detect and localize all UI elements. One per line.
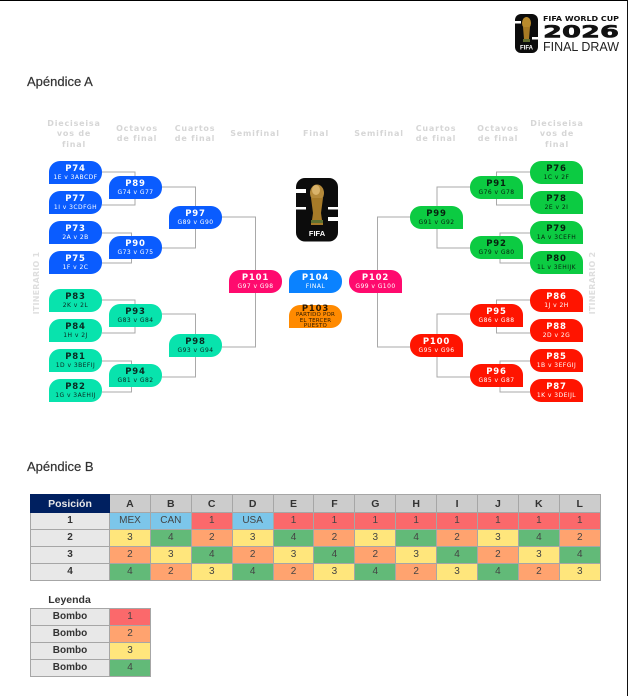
match P86: 1J v 2H bbox=[544, 302, 569, 308]
table: group positions by pot: E bbox=[290, 498, 297, 510]
match P79: 1A v 3CEFH bbox=[537, 234, 576, 240]
match P85 bbox=[530, 349, 583, 372]
match P85: P85 bbox=[546, 352, 567, 362]
match P88: 2D v 2G bbox=[543, 332, 570, 338]
logo text: 2026 bbox=[543, 22, 619, 42]
match P97: G89 v G90 bbox=[178, 218, 213, 226]
match P98: G93 v G94 bbox=[178, 346, 213, 354]
match P94: G81 v G82 bbox=[118, 376, 153, 384]
match P99 bbox=[410, 206, 463, 229]
match P96 bbox=[470, 364, 523, 387]
match P77: 1I v 3CDFGH bbox=[54, 204, 97, 210]
icon: central 26 FIFA trophy logo bbox=[296, 178, 338, 242]
match P92 bbox=[470, 236, 523, 259]
match P92: P92 bbox=[486, 238, 507, 248]
table: group positions by pot: 3 bbox=[577, 566, 583, 577]
column heading: Cuartos de final (left): de final bbox=[175, 134, 215, 143]
column heading: Semifinal (right): Semifinal bbox=[354, 129, 404, 138]
column heading: Cuartos de final (right): Cuartos bbox=[416, 124, 456, 133]
table: group positions by pot: 1 bbox=[291, 515, 296, 526]
match P103 third place: EL TERCER bbox=[300, 318, 331, 324]
table: group positions by pot: 2 bbox=[67, 532, 73, 543]
match P93: G83 v G84 bbox=[118, 316, 153, 324]
match P74: P74 bbox=[65, 164, 86, 174]
table: group positions by pot: 2 bbox=[168, 566, 174, 577]
table: group positions by pot bbox=[30, 494, 601, 581]
match P104 final bbox=[289, 270, 342, 293]
legend table: bombo colours: Bombo bbox=[53, 662, 87, 673]
logo text: FINAL DRAW bbox=[543, 39, 620, 54]
match P77 bbox=[49, 191, 102, 214]
match P84 bbox=[49, 319, 102, 342]
match P101: P101 bbox=[242, 272, 269, 282]
table: group positions by pot: CAN bbox=[160, 515, 181, 526]
column heading: Dieciseisavos de final (right): final bbox=[545, 140, 569, 149]
legend table: bombo colours bbox=[30, 608, 151, 677]
match P84: 1H v 2J bbox=[63, 332, 88, 338]
match P97 bbox=[169, 206, 222, 229]
logo text: FIFA WORLD CUP bbox=[543, 15, 619, 23]
match P90 bbox=[109, 236, 162, 259]
table: group positions by pot: 1 bbox=[577, 515, 583, 526]
legend table: bombo colours: 1 bbox=[127, 611, 133, 622]
column heading: Final: Final bbox=[303, 129, 329, 138]
page frame right line bbox=[627, 0, 628, 696]
table: group positions by pot: C bbox=[208, 498, 216, 510]
column heading: Cuartos de final (left): Cuartos bbox=[175, 124, 215, 133]
column heading: Octavos de final (right) bbox=[477, 124, 519, 143]
table: group positions by pot: Posición bbox=[48, 498, 92, 510]
table: group positions by pot: 3 bbox=[372, 532, 378, 543]
heading: Apéndice B: Apéndice B bbox=[27, 459, 94, 474]
table: group positions by pot: 1 bbox=[495, 515, 501, 526]
table: group positions by pot: 4 bbox=[127, 566, 133, 577]
table: group positions by pot: 3 bbox=[67, 549, 73, 560]
match P75: P75 bbox=[65, 254, 86, 264]
match P74: 1E v 3ABCDF bbox=[53, 174, 98, 180]
match P98: P98 bbox=[185, 336, 206, 346]
table: group positions by pot: K bbox=[535, 498, 543, 510]
table: group positions by pot: 1 bbox=[67, 515, 73, 526]
match P87: P87 bbox=[546, 382, 567, 392]
table: group positions by pot: 4 bbox=[168, 532, 174, 543]
legend table: bombo colours: Bombo bbox=[53, 628, 87, 639]
match P86: P86 bbox=[546, 292, 567, 302]
table: group positions by pot: 1 bbox=[372, 515, 378, 526]
table: group positions by pot: 1 bbox=[454, 515, 460, 526]
column heading: Octavos de final (right): Octavos bbox=[477, 124, 519, 133]
match P103 third place: PUESTO bbox=[304, 323, 327, 329]
table: group positions by pot: 4 bbox=[536, 532, 542, 543]
match P73 bbox=[49, 221, 102, 244]
table: group positions by pot: 4 bbox=[454, 549, 460, 560]
table: group positions by pot: 4 bbox=[250, 566, 255, 577]
match P104 final: FINAL bbox=[306, 282, 325, 290]
match P101 bbox=[229, 270, 282, 293]
table: group positions by pot: 3 bbox=[536, 549, 542, 560]
column heading: Dieciseisavos de final (right) bbox=[530, 119, 584, 149]
table: group positions by pot: 2 bbox=[413, 566, 419, 577]
match P85: 1B v 3EFGIJ bbox=[537, 362, 576, 368]
match P78: 2E v 2I bbox=[545, 204, 568, 210]
match P86 bbox=[530, 289, 583, 312]
match P82: P82 bbox=[65, 382, 86, 392]
match P88 bbox=[530, 319, 583, 342]
match P90: P90 bbox=[125, 238, 146, 248]
match P88: P88 bbox=[546, 322, 567, 332]
table: group positions by pot: 4 bbox=[67, 566, 73, 577]
label: Itinerario 2: ITINERARIO 2 bbox=[588, 252, 597, 314]
legend table: bombo colours: Bombo bbox=[53, 611, 87, 622]
column heading: Dieciseisavos de final (left): Dieciseisa bbox=[47, 119, 101, 128]
label: Itinerario 1: ITINERARIO 1 bbox=[32, 252, 41, 314]
match P102: P102 bbox=[362, 272, 389, 282]
table: group positions by pot: 2 bbox=[291, 566, 296, 577]
match P73: P73 bbox=[65, 224, 86, 234]
match P99: P99 bbox=[426, 208, 447, 218]
table: group positions by pot: 3 bbox=[413, 549, 419, 560]
match P89: P89 bbox=[125, 178, 146, 188]
match P87 bbox=[530, 379, 583, 402]
column heading: Semifinal (left): Semifinal bbox=[230, 129, 280, 138]
match P96: G85 v G87 bbox=[478, 376, 514, 384]
table: group positions by pot: 4 bbox=[372, 566, 378, 577]
match P78 bbox=[530, 191, 583, 214]
table: group positions by pot: 3 bbox=[209, 566, 214, 577]
match P95: G86 v G88 bbox=[478, 316, 514, 324]
match P95 bbox=[470, 304, 523, 327]
match P80: P80 bbox=[546, 254, 567, 264]
match P99: G91 v G92 bbox=[418, 218, 454, 226]
table: group positions by pot: 3 bbox=[250, 532, 255, 543]
match P79: P79 bbox=[546, 224, 567, 234]
match P100: G95 v G96 bbox=[418, 346, 454, 354]
table: group positions by pot: 2 bbox=[209, 532, 214, 543]
table: group positions by pot: 1 bbox=[536, 515, 542, 526]
table: group positions by pot: 2 bbox=[372, 549, 378, 560]
column heading: Dieciseisavos de final (left): final bbox=[62, 140, 86, 149]
match P79 bbox=[530, 221, 583, 244]
table: group positions by pot: 4 bbox=[577, 549, 583, 560]
match P95: P95 bbox=[486, 306, 507, 316]
page frame top line bbox=[0, 0, 628, 1]
match P76: 1C v 2F bbox=[544, 174, 569, 180]
match P90: G73 v G75 bbox=[118, 248, 153, 256]
match P94 bbox=[109, 364, 162, 387]
column heading: Octavos de final (right): de final bbox=[478, 134, 518, 143]
match P82 bbox=[49, 379, 102, 402]
match P84: P84 bbox=[65, 322, 86, 332]
logo text bbox=[543, 15, 620, 54]
match P74 bbox=[49, 161, 102, 184]
match P80 bbox=[530, 251, 583, 274]
match P96: P96 bbox=[486, 366, 507, 376]
legend title: Leyenda bbox=[48, 594, 91, 606]
match P102: G99 v G100 bbox=[355, 282, 396, 290]
icon: small 26 trophy emblem bbox=[515, 14, 538, 53]
match P91: G76 v G78 bbox=[478, 188, 514, 196]
legend table: bombo colours: 2 bbox=[127, 628, 133, 639]
table: group positions by pot: 4 bbox=[413, 532, 419, 543]
table: group positions by pot: 3 bbox=[168, 549, 174, 560]
table: group positions by pot: 3 bbox=[291, 549, 296, 560]
table: group positions by pot: USA bbox=[242, 515, 263, 526]
match P91: P91 bbox=[486, 178, 507, 188]
column heading: Octavos de final (left) bbox=[116, 124, 158, 143]
match P82: 1G v 3AEHIJ bbox=[55, 392, 96, 398]
match P78: P78 bbox=[546, 194, 567, 204]
table: group positions by pot: 2 bbox=[577, 532, 583, 543]
match P83: P83 bbox=[65, 292, 86, 302]
match P100: P100 bbox=[423, 336, 450, 346]
table: group positions by pot: G bbox=[371, 498, 379, 510]
match P103 third place: P103 bbox=[302, 304, 329, 314]
table: group positions by pot: 4 bbox=[495, 566, 501, 577]
table: group positions by pot: 2 bbox=[454, 532, 460, 543]
match P97: P97 bbox=[185, 208, 206, 218]
match P81: 1D v 3BEFIJ bbox=[56, 362, 95, 368]
legend table: bombo colours: 3 bbox=[127, 645, 133, 656]
match P77: P77 bbox=[65, 194, 86, 204]
table: group positions by pot: F bbox=[331, 498, 338, 510]
match P100 bbox=[410, 334, 463, 357]
match P83 bbox=[49, 289, 102, 312]
match P89: G74 v G77 bbox=[118, 188, 153, 196]
table: group positions by pot: 2 bbox=[332, 532, 337, 543]
table: group positions by pot: 3 bbox=[495, 532, 501, 543]
icon: small 26 trophy emblem: FIFA bbox=[520, 46, 534, 52]
match P94: P94 bbox=[125, 366, 146, 376]
logo: FIFA World Cup 2026 Final Draw bbox=[515, 14, 620, 54]
table: group positions by pot: A bbox=[126, 498, 134, 510]
match P98 bbox=[169, 334, 222, 357]
table: group positions by pot: 2 bbox=[250, 549, 255, 560]
match P81: P81 bbox=[65, 352, 86, 362]
legend table: bombo colours: Bombo bbox=[53, 645, 87, 656]
table: group positions by pot: I bbox=[456, 498, 459, 510]
table: group positions by pot: D bbox=[249, 498, 256, 510]
column heading: Cuartos de final (left) bbox=[175, 124, 215, 143]
icon: central 26 FIFA trophy logo: FIFA bbox=[309, 229, 326, 238]
column heading: Dieciseisavos de final (left) bbox=[47, 119, 101, 149]
match P76 bbox=[530, 161, 583, 184]
match P103 third place bbox=[289, 305, 342, 328]
match P102 bbox=[349, 270, 402, 293]
table: group positions by pot: 4 bbox=[209, 549, 214, 560]
match P92: G79 v G80 bbox=[478, 248, 514, 256]
match P104 final: P104 bbox=[302, 272, 329, 282]
match P75 bbox=[49, 251, 102, 274]
match P93 bbox=[109, 304, 162, 327]
table: group positions by pot: B bbox=[167, 498, 175, 510]
table: group positions by pot: 1 bbox=[413, 515, 419, 526]
match P93: P93 bbox=[125, 306, 146, 316]
match P75: 1F v 2C bbox=[63, 264, 88, 270]
table: group positions by pot: MEX bbox=[119, 515, 141, 526]
match P83: 2K v 2L bbox=[63, 302, 88, 308]
legend table: bombo colours: 4 bbox=[127, 662, 133, 673]
match P76: P76 bbox=[546, 164, 567, 174]
table: group positions by pot: 4 bbox=[291, 532, 296, 543]
table: group positions by pot: J bbox=[495, 498, 501, 510]
table: group positions by pot: 1 bbox=[209, 515, 214, 526]
match P89 bbox=[109, 176, 162, 199]
match P73: 2A v 2B bbox=[62, 234, 89, 240]
column heading: Dieciseisavos de final (right): Dieciseisa bbox=[530, 119, 584, 128]
table: group positions by pot: 3 bbox=[332, 566, 337, 577]
table: group positions by pot: 1 bbox=[332, 515, 337, 526]
column heading: Dieciseisavos de final (right): vos de bbox=[540, 129, 574, 138]
match P81 bbox=[49, 349, 102, 372]
match P87: 1K v 3DEIJL bbox=[537, 392, 576, 398]
column heading: Cuartos de final (right) bbox=[416, 124, 456, 143]
column heading: Dieciseisavos de final (left): vos de bbox=[57, 129, 91, 138]
table: group positions by pot: 2 bbox=[127, 549, 133, 560]
table: group positions by pot: H bbox=[412, 498, 420, 510]
table: group positions by pot: 2 bbox=[536, 566, 542, 577]
match P91 bbox=[470, 176, 523, 199]
match P101: G97 v G98 bbox=[238, 282, 273, 290]
table: group positions by pot: 3 bbox=[454, 566, 460, 577]
table: group positions by pot: 3 bbox=[127, 532, 133, 543]
match P80: 1L v 3EHIJK bbox=[537, 264, 576, 270]
match P103 third place: PARTIDO POR bbox=[296, 312, 335, 318]
table: group positions by pot: 4 bbox=[332, 549, 337, 560]
column heading: Octavos de final (left): Octavos bbox=[116, 124, 158, 133]
table: group positions by pot: L bbox=[577, 498, 583, 510]
heading: Apéndice A: Apéndice A bbox=[27, 74, 93, 89]
column heading: Cuartos de final (right): de final bbox=[416, 134, 456, 143]
table: group positions by pot: 2 bbox=[495, 549, 501, 560]
column heading: Octavos de final (left): de final bbox=[117, 134, 157, 143]
